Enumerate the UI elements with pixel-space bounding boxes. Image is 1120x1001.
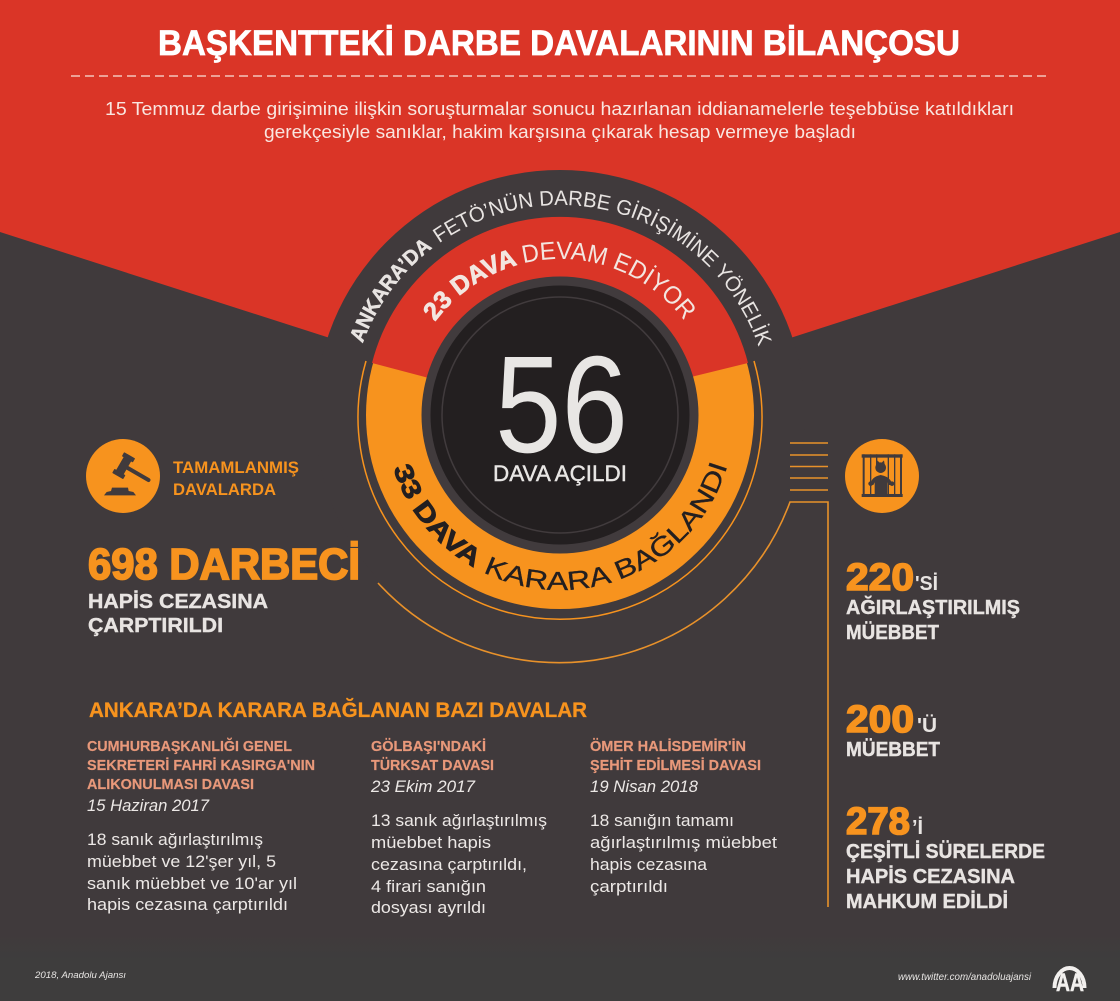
- case column 2: TÜRKSAT DAVASI: [371, 757, 494, 774]
- stat: 220: AĞIRLAŞTIRILMIŞ: [846, 595, 1020, 619]
- outer orange arc: [378, 502, 828, 907]
- case column 3: 18 sanığın tamamı: [590, 811, 734, 830]
- label: completed cases: DAVALARDA: [173, 481, 276, 499]
- stat: 278: MAHKUM EDİLDİ: [846, 890, 1008, 913]
- curved text: concluded cases: [394, 462, 727, 590]
- center caption: DAVA AÇILDI: [493, 461, 627, 486]
- curved text: continuing cases: DEVAM EDİYOR: [522, 242, 695, 320]
- stat: 220: 'Sİ: [915, 572, 938, 595]
- case column 1: sanık müebbet ve 10'ar yıl: [87, 874, 297, 893]
- intro text: gerekçesiyle sanıklar, hakim karşısına çıkarak hesap vermeye başladı: [264, 122, 856, 142]
- case column 2: 23 Ekim 2017: [370, 777, 476, 796]
- stat: 200: MÜEBBET: [846, 738, 940, 761]
- case column 1: 15 Haziran 2017: [87, 796, 210, 815]
- credit: 2018, Anadolu Ajansı: [34, 970, 126, 981]
- icon: prisoner behind bars: [845, 439, 919, 513]
- case column 1: müebbet ve 12'şer yıl, 5: [87, 852, 276, 871]
- case column 2: 4 firari sanığın: [371, 877, 486, 896]
- curved text: continuing cases: [424, 242, 695, 322]
- stat: 220: MÜEBBET: [846, 621, 939, 644]
- orange ring segment: [366, 221, 754, 609]
- case column 1: [87, 737, 315, 914]
- curved text: outer: FETÖ’NÜN DARBE GİRİŞİMİNE YÖNELİK: [432, 190, 772, 346]
- stat: 200: [846, 699, 940, 761]
- title: BAŞKENTTEKİ DARBE DAVALARININ BİLANÇOSU: [158, 24, 960, 63]
- case column 3: hapis cezasına: [590, 855, 708, 874]
- case column 2: 13 sanık ağırlaştırılmış: [371, 811, 547, 830]
- curved text: continuing cases: 23 DAVA: [424, 250, 518, 322]
- case column 1: ALIKONULMASI DAVASI: [87, 777, 254, 793]
- curved text: concluded cases: KARARA BAĞLANDI: [485, 462, 727, 590]
- case column 3: ağırlaştırılmış müebbet: [590, 833, 777, 852]
- label: completed cases: [173, 459, 299, 499]
- thin orange ring: [358, 361, 762, 619]
- case column 3: ÖMER HALİSDEMİR'İN: [590, 738, 746, 755]
- stat: 200: 'Ü: [917, 714, 937, 737]
- icon: agency logo: AA: [1056, 969, 1084, 997]
- stat: 278: [846, 801, 1045, 913]
- case column 3: 19 Nisan 2018: [590, 777, 699, 796]
- case column 3: ŞEHİT EDİLMESİ DAVASI: [590, 757, 761, 774]
- label: completed cases: TAMAMLANMIŞ: [173, 459, 299, 477]
- case column 1: hapis cezasına çarptırıldı: [87, 895, 288, 914]
- central circular diagram: [328, 170, 829, 907]
- case column 2: dosyası ayrıldı: [371, 898, 486, 917]
- icon: gavel: [86, 439, 160, 513]
- big number: 56: [495, 328, 628, 482]
- case column 2: [370, 738, 547, 917]
- stat: 220: [846, 557, 1020, 644]
- case column 1: CUMHURBAŞKANLIĞI GENEL: [87, 737, 292, 755]
- center disc: [422, 276, 698, 554]
- curved text: concluded cases: 33 DAVA: [394, 464, 477, 568]
- outer dark dome: [315, 170, 805, 660]
- case column 3: [590, 738, 777, 896]
- intro text: [105, 99, 1014, 142]
- red header shape: [0, 0, 1120, 412]
- case column 2: cezasına çarptırıldı,: [371, 855, 527, 874]
- stat: 220: 220: [846, 557, 914, 599]
- case column 2: GÖLBAŞI'NDAKİ: [371, 738, 486, 755]
- twitter address: www.twitter.com/anadoluajansi: [898, 971, 1032, 983]
- connector lines: [790, 443, 828, 490]
- stat caption: HAPİS CEZASINA: [88, 590, 268, 613]
- case column 1: 18 sanık ağırlaştırılmış: [87, 830, 263, 849]
- section heading: ANKARA’DA KARARA BAĞLANAN BAZI DAVALAR: [89, 698, 587, 722]
- stat caption: [88, 590, 268, 637]
- red ring segment: [372, 217, 748, 415]
- case column 1: SEKRETERİ FAHRİ KASIRGA'NIN: [87, 757, 315, 774]
- intro text: 15 Temmuz darbe girişimine ilişkin soruşturmalar sonucu hazırlanan iddianamelerle teşebbüse katıldıkları: [105, 99, 1014, 119]
- headline stat: 698: 698 DARBECİ: [88, 541, 360, 589]
- stat: 278: HAPİS CEZASINA: [846, 865, 1015, 888]
- curved text: outer: ANKARA’DA: [350, 240, 432, 344]
- stat: 200: 200: [846, 699, 914, 741]
- case column 3: çarptırıldı: [590, 877, 668, 896]
- stat: 278: ÇEŞİTLİ SÜRELERDE: [846, 840, 1045, 863]
- stat: 278: ’İ: [912, 816, 923, 839]
- stat caption: ÇARPTIRILDI: [88, 614, 223, 637]
- case column 2: müebbet hapis: [371, 833, 491, 852]
- stat: 278: 278: [846, 801, 910, 843]
